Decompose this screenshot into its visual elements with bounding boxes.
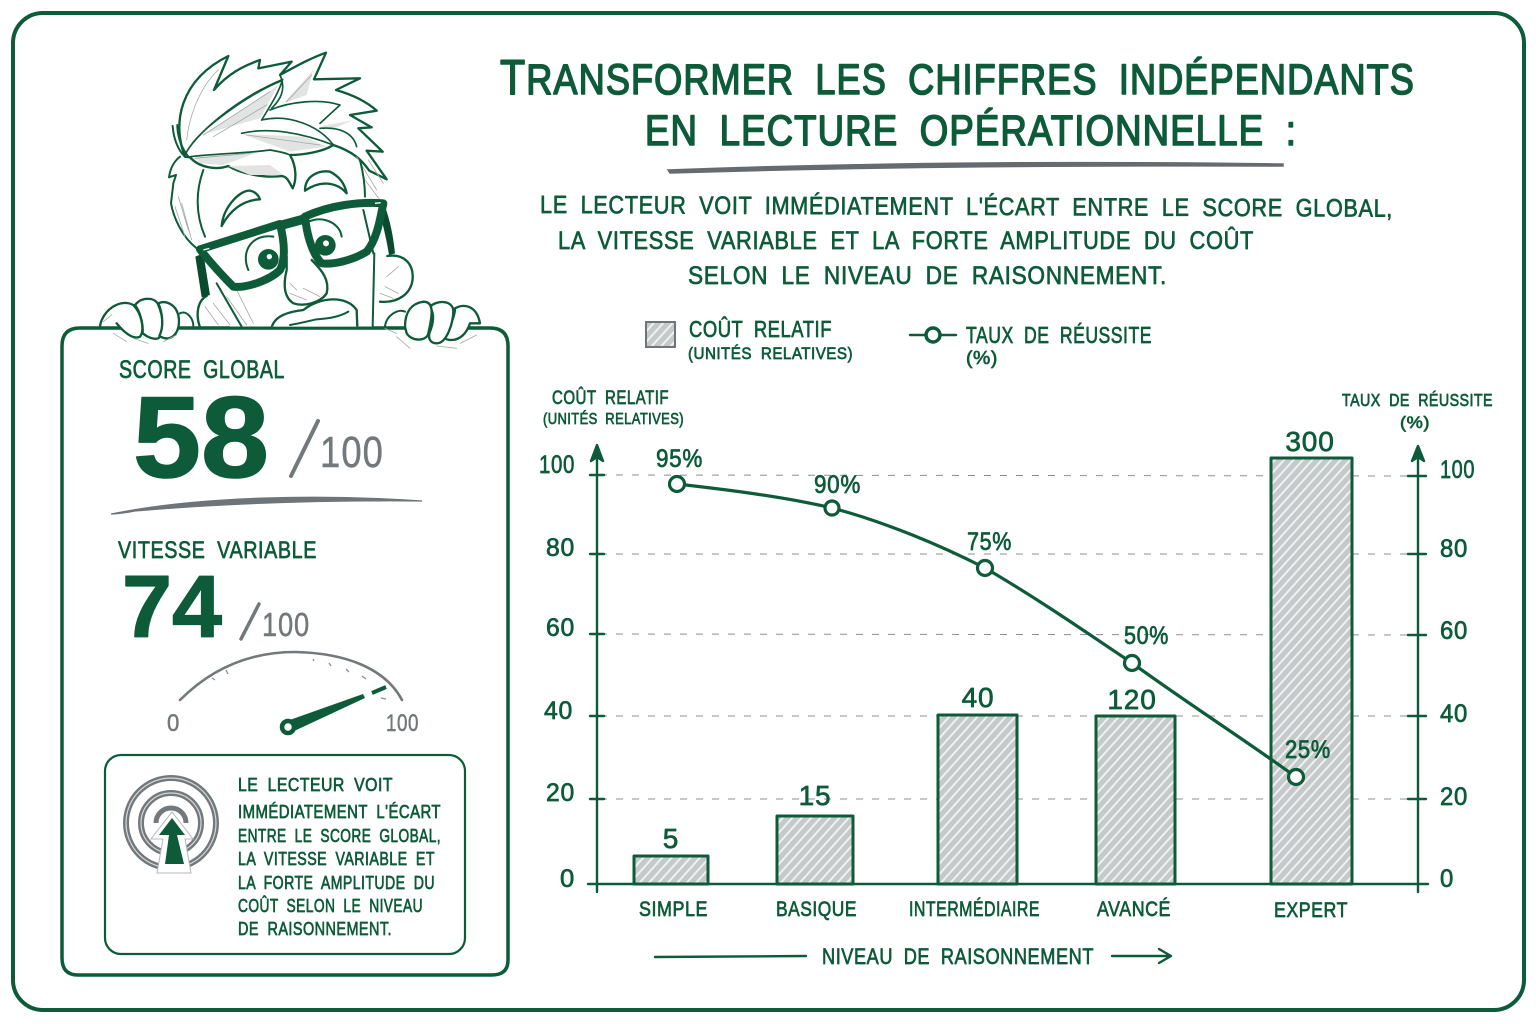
legend — [646, 315, 1152, 368]
face outline — [198, 160, 374, 327]
left axis numbers: 20 — [546, 779, 575, 807]
callout text: LA FORTE AMPLITUDE DU — [238, 872, 435, 893]
subtitle: LE LECTEUR VOIT IMMÉDIATEMENT L'ÉCART ENTRE LE SCORE GLOBAL, — [540, 190, 1393, 223]
success percentage labels: 75% — [967, 528, 1012, 556]
glasses — [200, 203, 383, 287]
legend swatch: relative cost — [646, 322, 675, 347]
score 74 of 100: 74 — [122, 557, 222, 656]
right axis numbers: 100 — [1440, 456, 1475, 484]
bar value labels: 40 — [962, 682, 994, 713]
category labels: EXPERT — [1274, 898, 1348, 922]
chart: cost bars and success line — [539, 387, 1493, 969]
left axis numbers — [539, 451, 575, 893]
bar: expert — [1271, 458, 1352, 884]
glasses temples — [195, 207, 395, 297]
bar: avancé — [1096, 716, 1175, 884]
left ear — [198, 296, 207, 327]
score 74 of 100: 100 — [262, 606, 310, 643]
right axis numbers — [1440, 456, 1475, 893]
bar: intermédiaire — [938, 715, 1017, 884]
character peeking over the card — [100, 53, 480, 348]
right axis — [1408, 446, 1426, 884]
right eyebrow — [305, 171, 347, 193]
x axis title with arrow: NIVEAU DE RAISONNEMENT — [822, 944, 1094, 969]
callout text: LA VITESSE VARIABLE ET — [238, 848, 435, 869]
bar value labels — [663, 426, 1335, 854]
right axis title: TAUX DE RÉUSSITE — [1342, 390, 1493, 410]
right axis numbers: 20 — [1440, 783, 1468, 811]
legend label: success rate — [966, 322, 1152, 368]
legend label: success rate: (%) — [966, 348, 998, 368]
score 58 of 100 — [133, 374, 384, 502]
title — [500, 51, 1415, 155]
subtitle: LA VITESSE VARIABLE ET LA FORTE AMPLITUDE DU COÛT — [558, 226, 1254, 255]
score global label: SCORE GLOBAL — [119, 356, 285, 384]
left axis numbers: 60 — [546, 614, 575, 642]
right hand — [385, 302, 480, 348]
category labels: AVANCÉ — [1097, 896, 1171, 921]
eyes — [246, 219, 342, 270]
category labels: BASIQUE — [776, 897, 857, 921]
success percentage labels: 25% — [1285, 736, 1331, 764]
score 58 of 100: 58 — [133, 374, 269, 502]
left axis numbers: 0 — [560, 865, 575, 893]
left axis numbers: 40 — [544, 697, 573, 725]
left axis title — [543, 387, 684, 428]
left hand — [100, 299, 193, 343]
hair — [179, 53, 387, 188]
bar value labels: 300 — [1285, 426, 1335, 457]
left axis — [590, 445, 604, 884]
gridlines — [600, 475, 1418, 799]
right axis title: (%) — [1400, 413, 1430, 432]
callout text: DE RAISONNEMENT. — [238, 918, 392, 939]
bar: simple — [634, 856, 708, 884]
subtitle — [540, 190, 1393, 290]
score 74 of 100 — [122, 557, 310, 656]
moustache — [272, 299, 357, 327]
face fill — [230, 326, 373, 327]
panel: score card — [62, 328, 508, 975]
bar value labels: 15 — [799, 780, 831, 811]
success percentage labels: 95% — [656, 445, 703, 473]
left axis numbers: 100 — [539, 451, 575, 479]
side hair — [169, 125, 383, 248]
bar: basique — [777, 816, 853, 884]
head above card edge — [169, 53, 413, 327]
category labels — [639, 896, 1348, 922]
success percentage labels — [656, 445, 1331, 764]
x axis title with arrow — [655, 944, 1171, 969]
gauge: 100 — [386, 710, 419, 737]
legend label: relative cost — [688, 315, 853, 363]
title underline — [668, 163, 1283, 173]
right axis numbers: 80 — [1440, 535, 1468, 563]
right ear — [380, 256, 413, 302]
category labels: INTERMÉDIAIRE — [909, 896, 1040, 921]
subtitle: SELON LE NIVEAU DE RAISONNEMENT. — [688, 262, 1167, 290]
callout text: COÛT SELON LE NIVEAU — [238, 895, 423, 916]
legend label: relative cost: (UNITÉS RELATIVES) — [688, 344, 853, 363]
legend label: relative cost: COÛT RELATIF — [689, 315, 832, 342]
legend marker: success rate — [910, 328, 956, 342]
success line markers — [670, 476, 1304, 784]
score 58 of 100: 100 — [320, 428, 384, 477]
divider stroke — [111, 497, 422, 514]
bar value labels: 120 — [1107, 684, 1157, 715]
callout text — [238, 774, 441, 939]
callout text: IMMÉDIATEMENT L'ÉCART — [238, 801, 441, 822]
right axis title — [1342, 390, 1493, 432]
nose — [285, 257, 327, 305]
right axis numbers: 60 — [1440, 617, 1468, 645]
gauge: 0 — [167, 710, 180, 737]
right axis numbers: 40 — [1440, 700, 1468, 728]
success percentage labels: 50% — [1124, 622, 1169, 650]
bar value labels: 5 — [663, 823, 679, 854]
right axis numbers: 0 — [1440, 865, 1454, 893]
success line — [677, 484, 1296, 777]
callout text: LE LECTEUR VOIT — [238, 774, 393, 795]
title: EN LECTURE OPÉRATIONNELLE : — [645, 107, 1297, 155]
left eyebrow — [222, 191, 260, 226]
callout box — [105, 755, 465, 954]
category labels: SIMPLE — [639, 897, 708, 921]
vitesse variable label: VITESSE VARIABLE — [118, 537, 317, 564]
card outline — [62, 328, 508, 975]
legend label: success rate: TAUX DE RÉUSSITE — [966, 322, 1152, 348]
baseline — [588, 884, 1428, 892]
gauge — [167, 652, 419, 737]
left axis numbers: 80 — [546, 534, 575, 562]
left axis title: COÛT RELATIF — [552, 387, 669, 409]
success percentage labels: 90% — [814, 471, 861, 499]
icon: target with arrow — [126, 778, 216, 873]
callout text: ENTRE LE SCORE GLOBAL, — [238, 825, 441, 846]
left axis title: (UNITÉS RELATIVES) — [543, 411, 684, 428]
